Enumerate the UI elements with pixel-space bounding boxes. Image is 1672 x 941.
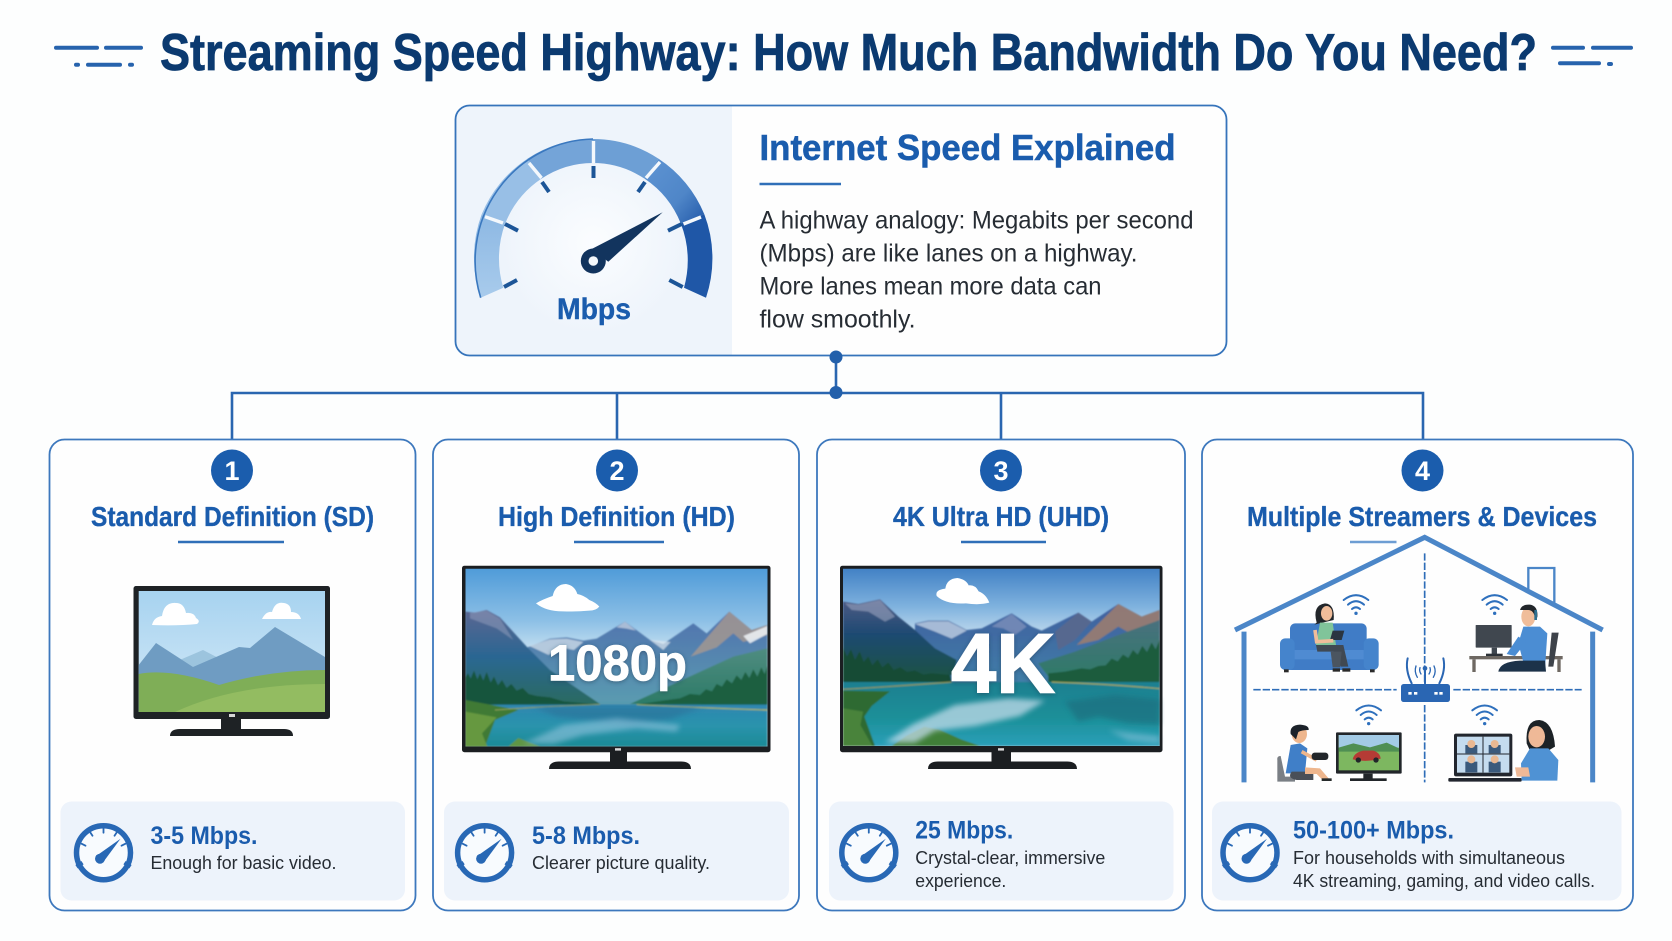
connector tree xyxy=(232,350,1423,439)
icon: speedometer xyxy=(474,139,712,335)
woman on video call with laptop xyxy=(1448,705,1558,782)
house outline xyxy=(1235,537,1603,782)
stat box xyxy=(444,802,789,900)
resolution label: 4K xyxy=(951,616,1055,710)
card heading: Standard Definition (SD) xyxy=(91,501,374,532)
panel body text: More lanes mean more data can xyxy=(760,272,1102,300)
room dividers xyxy=(1253,553,1582,782)
house illustration xyxy=(1235,537,1603,782)
panel: internet speed explained xyxy=(456,106,1226,356)
icon: gauge xyxy=(1223,826,1277,880)
stat box xyxy=(60,802,405,900)
number badge 1: 1 xyxy=(224,456,240,486)
icon: gauge xyxy=(76,826,130,880)
card 4: multiple streamers and devices xyxy=(1202,440,1633,910)
speed description: Clearer picture quality. xyxy=(532,853,710,873)
speed description: Enough for basic video. xyxy=(150,853,336,873)
title xyxy=(56,24,1631,82)
panel body text: flow smoothly. xyxy=(760,306,916,334)
speed description xyxy=(915,848,1105,891)
gauge label: Mbps xyxy=(557,293,631,326)
stat box xyxy=(829,802,1174,900)
card heading: Multiple Streamers & Devices xyxy=(1247,501,1597,532)
card heading: High Definition (HD) xyxy=(498,501,735,532)
number badge 2: 2 xyxy=(609,456,625,486)
man at desktop with headset xyxy=(1469,595,1563,672)
speed description: experience. xyxy=(915,871,1006,891)
speed value: 50-100+ Mbps. xyxy=(1293,816,1454,844)
resolution label: 1080p xyxy=(548,634,687,692)
number badge 3 xyxy=(980,450,1022,492)
HD television with 1080p landscape xyxy=(462,566,770,769)
speed description: For households with simultaneous xyxy=(1293,848,1565,868)
stat box xyxy=(1212,802,1622,900)
router xyxy=(1401,658,1450,702)
title speed lines: left xyxy=(56,48,141,65)
woman on sofa with tablet xyxy=(1280,595,1379,672)
icon: gauge xyxy=(458,826,512,880)
4K television with landscape xyxy=(840,566,1162,769)
panel body text xyxy=(760,206,1194,334)
speed value: 5-8 Mbps. xyxy=(532,822,640,850)
card 3: 4K ultra HD xyxy=(817,440,1185,910)
card heading: 4K Ultra HD (UHD) xyxy=(893,501,1109,532)
panel body text: (Mbps) are like lanes on a highway. xyxy=(760,240,1138,268)
SD television xyxy=(134,586,330,736)
number badge 1 xyxy=(211,450,253,492)
speed description: Crystal-clear, immersive xyxy=(915,848,1105,868)
speed value: 25 Mbps. xyxy=(915,816,1013,844)
panel body text: A highway analogy: Megabits per second xyxy=(760,206,1194,234)
title speed lines: right xyxy=(1553,48,1631,64)
speed description xyxy=(1293,848,1595,891)
icon: gauge xyxy=(842,826,896,880)
speed value: 3-5 Mbps. xyxy=(150,822,258,850)
boy with game controller xyxy=(1277,705,1402,782)
card 1: standard definition xyxy=(50,440,416,910)
number badge 3: 3 xyxy=(993,456,1009,486)
speed description: 4K streaming, gaming, and video calls. xyxy=(1293,871,1595,891)
number badge 4 xyxy=(1402,450,1444,492)
panel heading: Internet Speed Explained xyxy=(760,127,1176,168)
card 2: high definition xyxy=(433,440,799,910)
number badge 2 xyxy=(596,450,638,492)
number badge 4: 4 xyxy=(1415,456,1430,486)
